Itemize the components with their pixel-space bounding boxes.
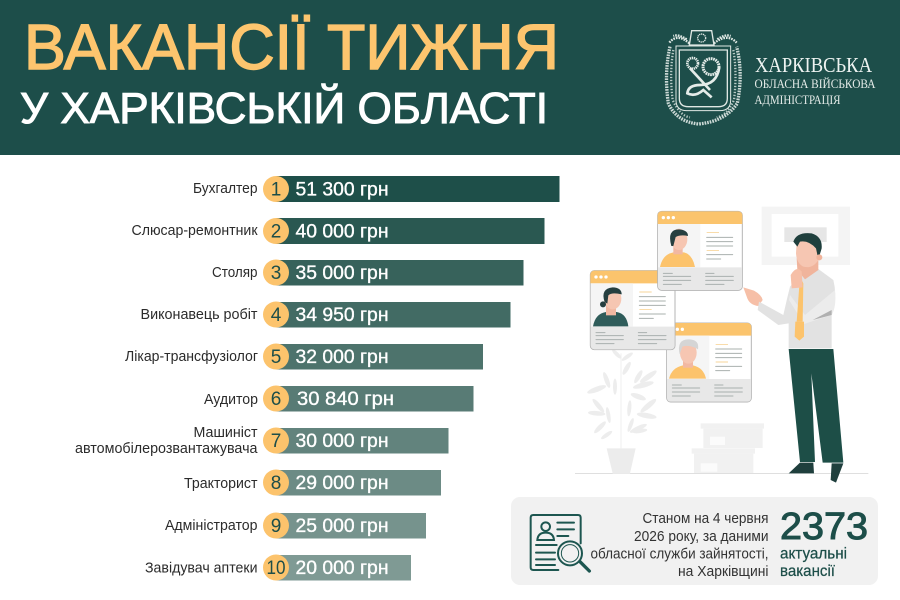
logo text: ОБЛАСНА ВІЙСЬКОВА (754, 76, 876, 91)
row 7: 7 (271, 431, 281, 452)
row 5: Лікар-трансфузіолог (125, 348, 258, 365)
vacancy caption (780, 546, 847, 580)
panel description (590, 510, 768, 580)
logo: regional coat of arms (667, 31, 740, 124)
row 9: 9 (271, 516, 281, 537)
row 10: Завідувач аптеки (145, 560, 258, 576)
man (743, 233, 843, 483)
row 8: Тракторист (184, 475, 258, 492)
panel description: на Харківщині (678, 563, 768, 580)
panel description: Станом на 4 червня (642, 510, 768, 527)
row 5 (125, 344, 483, 370)
row 3 (212, 260, 524, 286)
plant (586, 348, 658, 473)
row 4: 34 950 грн (296, 305, 388, 326)
panel description: 2026 року, за даними (634, 528, 768, 545)
row 1: 51 300 грн (296, 180, 388, 200)
row 7: 30 000 грн (296, 431, 388, 452)
row 6: 30 840 грн (297, 389, 394, 410)
row 6: Аудитор (204, 391, 258, 408)
card: woman candidate (590, 271, 675, 350)
row 9: 25 000 грн (296, 516, 388, 537)
row 4 (140, 302, 510, 328)
panel description: обласної служби зайнятості, (590, 546, 768, 562)
icon: document with magnifier (531, 515, 589, 571)
wall frame (762, 207, 850, 265)
row 4: 4 (271, 305, 282, 326)
subtitle: У ХАРКІВСЬКІЙ ОБЛАСТІ (20, 82, 548, 133)
row 7: автомобілерозвантажувача (75, 440, 258, 457)
row 8 (184, 470, 441, 496)
row 6: 6 (271, 389, 281, 410)
ranking chart (75, 176, 560, 580)
row 8: 29 000 грн (296, 473, 388, 494)
row 1: Бухгалтер (193, 180, 258, 197)
row 9: Адміністратор (165, 517, 258, 534)
card: senior candidate (667, 323, 751, 402)
title: ВАКАНСІЇ ТИЖНЯ (24, 11, 559, 83)
info panel (511, 497, 878, 585)
row 2: 2 (271, 222, 281, 242)
logo text: ХАРКІВСЬКА (755, 53, 873, 77)
row 3: 3 (271, 263, 281, 284)
vacancy count: 2373 (780, 506, 868, 548)
floor line (575, 472, 868, 475)
row 10: 10 (266, 558, 286, 579)
row 9 (165, 512, 426, 538)
row 2 (132, 218, 544, 244)
row 7: Машиніст (194, 424, 258, 441)
logo text: АДМІНІСТРАЦІЯ (754, 92, 841, 107)
row 10: 20 000 грн (296, 558, 388, 579)
vacancy caption: вакансії (780, 563, 836, 580)
row 1 (193, 176, 560, 202)
row 3: Столяр (212, 264, 258, 281)
row 5: 32 000 грн (296, 347, 388, 368)
row 8: 8 (271, 473, 281, 494)
row 7 (75, 424, 448, 457)
vacancy caption: актуальні (780, 546, 847, 562)
row 6 (204, 386, 474, 412)
illustration: recruiter reviewing candidate cards (575, 207, 868, 483)
row 10 (145, 554, 411, 580)
header band (0, 0, 900, 155)
card: young candidate (658, 211, 742, 290)
row 5: 5 (271, 347, 281, 368)
row 1: 1 (271, 180, 281, 200)
row 3: 35 000 грн (296, 263, 388, 284)
storage boxes (692, 423, 764, 473)
row 4: Виконавець робіт (140, 306, 258, 323)
row 2: 40 000 грн (296, 222, 388, 242)
row 2: Слюсар-ремонтник (132, 222, 258, 239)
logo text (754, 53, 876, 107)
